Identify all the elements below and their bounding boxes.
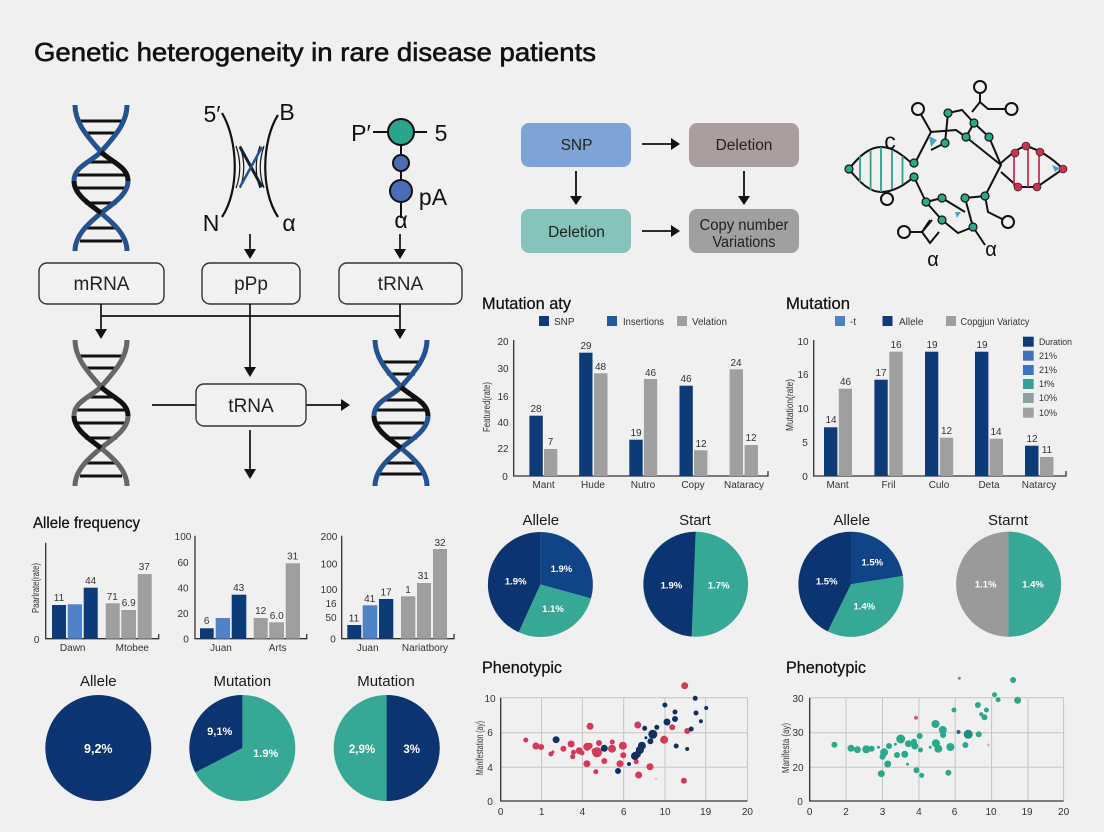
icon: crossed strands with labels: α bbox=[282, 210, 296, 236]
heading: Allele frequency: Allele frequency bbox=[33, 515, 140, 532]
scatter plot: red and navy: 1 bbox=[539, 807, 545, 818]
bar chart: Mutation: 10 bbox=[797, 404, 809, 415]
heading: Mutation aty: Mutation aty bbox=[482, 294, 571, 313]
scatter plot: red and navy: 4 bbox=[487, 763, 493, 774]
pie: Allele lower: Allele bbox=[80, 673, 117, 690]
scatter plot: teal: 20 bbox=[792, 763, 804, 774]
bar chart: Mutation: Deta bbox=[978, 480, 1000, 491]
box: tRNA top: tRNA bbox=[378, 274, 424, 295]
scatter plot: teal: 0 bbox=[797, 797, 803, 808]
bar chart: allele frequency B: Juan bbox=[210, 643, 232, 654]
pie: Start upper 1: 1.9% bbox=[661, 580, 683, 592]
bar chart: Mutation aty: Copy bbox=[681, 480, 705, 491]
bar chart: Mutation: 14 bbox=[825, 415, 837, 426]
bar chart: Mutation aty: 16 bbox=[497, 392, 509, 403]
icon: nucleotide chain bbox=[351, 119, 448, 233]
bar chart: Mutation: 19 bbox=[976, 340, 988, 351]
bar chart: Mutation aty: 22 bbox=[497, 444, 509, 455]
pie: Start upper 1: Start bbox=[679, 512, 712, 529]
legend: right side color key: 10% bbox=[1039, 408, 1057, 418]
bar chart: allele frequency C: 200 bbox=[321, 532, 338, 543]
flow diagram: variant types: Deletion bbox=[716, 137, 772, 154]
bar chart: allele frequency B bbox=[175, 532, 307, 654]
scatter plot: red and navy: 10 bbox=[484, 694, 496, 705]
bar chart: allele frequency C: 41 bbox=[364, 594, 376, 605]
icon: molecular network with helices: α bbox=[985, 239, 997, 261]
scatter plot: red and navy: 0 bbox=[498, 807, 504, 818]
heading: Phenotypic right: Phenotypic bbox=[786, 658, 866, 677]
bar chart: Mutation aty: 48 bbox=[595, 362, 606, 373]
bar chart: allele frequency A: 11 bbox=[54, 593, 65, 604]
bar chart: allele frequency A: Paarlrate(rate) bbox=[31, 563, 42, 613]
bar chart: allele frequency C: 17 bbox=[380, 588, 392, 598]
pie: Mutation lower 1: Mutation bbox=[214, 673, 271, 690]
bar chart: Mutation bbox=[785, 337, 1066, 491]
pie: Allele lower: 9,2% bbox=[84, 742, 113, 756]
scatter plot: red and navy: 6 bbox=[621, 807, 627, 818]
pie: Mutation lower 2 bbox=[334, 673, 440, 801]
icon: blue DNA helix bbox=[74, 105, 128, 251]
box: tRNA top bbox=[339, 263, 462, 304]
bar chart: allele frequency C: 100 bbox=[321, 560, 338, 570]
scatter plot: teal: Manifesta (ay) bbox=[781, 723, 792, 773]
bar chart: Mutation aty: 46 bbox=[680, 374, 692, 385]
bar chart: Mutation: Mant bbox=[826, 480, 849, 491]
legend: bar chart 1: SNP bbox=[554, 317, 575, 328]
bar chart: Mutation aty: 28 bbox=[530, 404, 542, 415]
bar chart: allele frequency A: Dawn bbox=[60, 643, 85, 654]
legend: right side color key bbox=[1023, 337, 1072, 418]
bar chart: allele frequency C: 11 bbox=[349, 614, 360, 624]
flow diagram: variant types: Deletion bbox=[548, 224, 605, 241]
legend: right side color key: 21% bbox=[1039, 365, 1057, 375]
pie: Allele upper 2: 1.5% bbox=[861, 558, 884, 568]
bar chart: Mutation aty: Hude bbox=[581, 480, 605, 491]
pie: Start upper 1 bbox=[643, 512, 748, 637]
legend: bar chart 2: Copgjun Variatcy bbox=[960, 317, 1030, 328]
icon: nucleotide chain: pA bbox=[419, 184, 448, 210]
bar chart: allele frequency C: 31 bbox=[418, 571, 429, 582]
scatter plot: teal: 10 bbox=[985, 807, 997, 818]
bar chart: allele frequency A: Mtobee bbox=[116, 643, 149, 654]
bar chart: allele frequency B: 6 bbox=[204, 616, 210, 627]
scatter plot: teal: 3 bbox=[880, 807, 886, 818]
bar chart: Mutation: Fril bbox=[882, 480, 895, 491]
scatter plot: teal: 4 bbox=[916, 807, 922, 818]
icon: molecular network with helices: α bbox=[927, 249, 939, 271]
pie: Allele upper 2: Allele bbox=[833, 512, 870, 529]
icon: gray DNA helix bbox=[74, 340, 128, 486]
bar chart: allele frequency B: 100 bbox=[175, 532, 192, 543]
scatter plot: red and navy: 6 bbox=[487, 728, 493, 739]
pie: Mutation lower 1: 9,1% bbox=[207, 726, 232, 738]
pie: Start upper 2: 1.1% bbox=[975, 580, 997, 590]
icon: crossed strands with labels bbox=[203, 99, 296, 236]
scatter plot: teal: 19 bbox=[1021, 807, 1033, 818]
bar chart: allele frequency A: 6.9 bbox=[122, 598, 136, 609]
box: mRNA: mRNA bbox=[74, 274, 130, 295]
bar chart: Mutation aty: Mant bbox=[532, 480, 555, 491]
pie: Mutation lower 1 bbox=[189, 673, 295, 801]
bar chart: Mutation: 17 bbox=[875, 368, 887, 379]
scatter plot: teal: 6 bbox=[952, 807, 958, 818]
bar chart: Mutation: 46 bbox=[840, 377, 851, 388]
scatter plot: red and navy: 4 bbox=[580, 807, 586, 818]
pie: Mutation lower 2: 3% bbox=[403, 744, 420, 756]
bar chart: Mutation: Natarcy bbox=[1022, 480, 1056, 491]
pie: Allele upper 2: 1.4% bbox=[853, 602, 876, 612]
bar chart: allele frequency C bbox=[321, 532, 454, 654]
bar chart: Mutation aty: 29 bbox=[580, 341, 592, 352]
flow diagram: variant types: Copy number bbox=[700, 217, 788, 234]
scatter plot: teal: 20 bbox=[1058, 807, 1070, 818]
bar chart: Mutation aty: 7 bbox=[548, 437, 554, 448]
box: pPp: pPp bbox=[234, 274, 268, 295]
icon: navy DNA helix bbox=[374, 340, 428, 486]
icon: molecular network with helices: c bbox=[884, 128, 896, 154]
bar chart: Mutation: Culo bbox=[929, 480, 950, 491]
legend: right side color key: 21% bbox=[1039, 351, 1057, 361]
icon: nucleotide chain: P′ bbox=[351, 120, 371, 146]
bar chart: Mutation aty: 24 bbox=[730, 358, 742, 369]
bar chart: Mutation: 11 bbox=[1042, 445, 1053, 456]
icon: nucleotide chain: α bbox=[394, 207, 408, 233]
bar chart: allele frequency C: 1 bbox=[405, 585, 411, 596]
bar chart: allele frequency B: 20 bbox=[177, 609, 189, 620]
bar chart: Mutation aty: 30 bbox=[497, 364, 509, 375]
scatter plot: teal: 30 bbox=[792, 728, 804, 739]
title: Genetic heterogeneity in rare disease patients bbox=[34, 37, 596, 67]
flow diagram: variant types bbox=[521, 123, 799, 253]
pie: Mutation lower 2: Mutation bbox=[357, 673, 415, 690]
legend: bar chart 2 bbox=[835, 316, 1030, 328]
pie: Allele upper 1: Allele bbox=[522, 512, 559, 529]
bar chart: allele frequency B: 43 bbox=[233, 583, 245, 594]
heading: Mutation: Mutation bbox=[786, 294, 850, 313]
bar chart: allele frequency A: 71 bbox=[107, 592, 118, 603]
bar chart: Mutation: 10 bbox=[797, 337, 809, 348]
icon: crossed strands with labels: B bbox=[279, 99, 295, 125]
bar chart: allele frequency C: 50 bbox=[325, 613, 337, 624]
scatter plot: red and navy: 19 bbox=[700, 807, 712, 818]
bar chart: Mutation: 12 bbox=[941, 426, 952, 437]
heading: Phenotypic left: Phenotypic bbox=[482, 658, 562, 677]
bar chart: Mutation aty: 12 bbox=[695, 439, 707, 450]
bar chart: Mutation aty: 40 bbox=[497, 418, 509, 429]
pie: Mutation lower 1: 1.9% bbox=[253, 748, 278, 760]
bar chart: allele frequency C: 32 bbox=[434, 538, 446, 549]
bar chart: allele frequency C: 0 bbox=[330, 634, 336, 646]
bar chart: Mutation: 16 bbox=[890, 340, 902, 351]
bar chart: allele frequency C: 16 bbox=[325, 599, 337, 610]
bar chart: allele frequency A: 0 bbox=[34, 635, 40, 646]
legend: right side color key: Duration bbox=[1039, 337, 1072, 347]
bar chart: allele frequency B: 12 bbox=[255, 606, 267, 617]
bar chart: Mutation aty: 12 bbox=[745, 433, 757, 444]
box: pPp bbox=[202, 263, 300, 304]
pie: Start upper 2: Starnt bbox=[988, 512, 1029, 529]
bar chart: allele frequency B: 6.0 bbox=[270, 611, 284, 622]
bar chart: allele frequency B: 0 bbox=[183, 634, 189, 646]
pie: Mutation lower 2: 2,9% bbox=[349, 744, 375, 756]
pie: Allele upper 1: 1.9% bbox=[505, 576, 527, 588]
icon: molecular network with helices bbox=[845, 81, 1067, 271]
bar chart: Mutation aty: 20 bbox=[497, 337, 509, 348]
bar chart: Mutation: 12 bbox=[1026, 434, 1038, 445]
bar chart: allele frequency A: 37 bbox=[139, 562, 150, 573]
legend: bar chart 1: Velation bbox=[692, 317, 727, 328]
pie: Allele lower bbox=[45, 673, 151, 801]
pie: Start upper 2: 1.4% bbox=[1022, 580, 1044, 590]
bar chart: Mutation aty bbox=[482, 337, 768, 491]
bar chart: Mutation aty: Nataracy bbox=[724, 480, 764, 491]
box: tRNA middle: tRNA bbox=[228, 396, 274, 417]
bar chart: allele frequency C: Juan bbox=[357, 643, 379, 654]
box: mRNA bbox=[39, 263, 164, 304]
scatter plot: red and navy: Manifestation (ay) bbox=[475, 721, 486, 775]
pie: Allele upper 1: 1.9% bbox=[551, 564, 573, 575]
legend: right side color key: 10% bbox=[1039, 393, 1057, 403]
pie: Allele upper 2 bbox=[798, 512, 904, 637]
scatter plot: red and navy: 0 bbox=[487, 797, 493, 808]
bar chart: allele frequency B: Arts bbox=[269, 643, 287, 654]
bar chart: Mutation: 14 bbox=[990, 427, 1002, 438]
scatter plot: teal bbox=[781, 677, 1070, 818]
bar chart: Mutation aty: Nutro bbox=[631, 480, 656, 491]
bar chart: allele frequency B: 40 bbox=[177, 584, 189, 594]
scatter plot: teal: 0 bbox=[807, 807, 813, 818]
pie: Start upper 1: 1.7% bbox=[708, 580, 730, 592]
legend: right side color key: 1f% bbox=[1039, 379, 1055, 389]
bar chart: Mutation aty: 19 bbox=[630, 428, 642, 439]
pie: Allele upper 2: 1.5% bbox=[816, 576, 838, 588]
icon: crossed strands with labels: N bbox=[203, 210, 219, 236]
bar chart: allele frequency C: Nariatbory bbox=[402, 643, 448, 654]
icon: nucleotide chain: 5 bbox=[435, 120, 447, 146]
legend: bar chart 1 bbox=[539, 316, 727, 328]
pie: Allele upper 1: 1.1% bbox=[542, 604, 564, 615]
icon: crossed strands with labels: 5′ bbox=[203, 101, 221, 127]
bar chart: Mutation: 16 bbox=[797, 370, 809, 381]
flow diagram: variant types: SNP bbox=[561, 137, 592, 154]
bar chart: allele frequency A bbox=[31, 543, 159, 654]
bar chart: Mutation aty: Featured(rate) bbox=[482, 382, 493, 432]
pie: Start upper 2 bbox=[956, 512, 1061, 637]
legend: bar chart 2: Allele bbox=[899, 317, 924, 328]
bar chart: allele frequency A: 44 bbox=[85, 576, 97, 587]
legend: bar chart 1: Insertions bbox=[623, 317, 664, 328]
legend: bar chart 2: -t bbox=[850, 317, 856, 328]
box: tRNA middle bbox=[196, 384, 306, 426]
bar chart: allele frequency C: 100 bbox=[321, 585, 338, 596]
scatter plot: red and navy: 20 bbox=[742, 807, 753, 818]
bar chart: Mutation aty: 46 bbox=[645, 368, 656, 379]
bar chart: Mutation: 19 bbox=[926, 340, 938, 351]
scatter plot: teal: 30 bbox=[792, 694, 804, 705]
flow diagram: variant types: Variations bbox=[712, 234, 776, 251]
bar chart: Mutation: Mutation(rate) bbox=[785, 379, 796, 431]
bar chart: allele frequency B: 31 bbox=[287, 552, 299, 562]
pie: Allele upper 1 bbox=[488, 512, 593, 637]
bar chart: Mutation: 5 bbox=[802, 438, 808, 449]
scatter plot: red and navy: 10 bbox=[659, 807, 671, 818]
bar chart: allele frequency B: 60 bbox=[177, 558, 189, 569]
pathway connector arrows bbox=[95, 234, 406, 479]
scatter plot: red and navy bbox=[475, 682, 753, 818]
scatter plot: teal: 2 bbox=[843, 807, 849, 818]
bar chart: Mutation: 0 bbox=[802, 472, 808, 483]
bar chart: Mutation aty: 0 bbox=[502, 472, 508, 483]
